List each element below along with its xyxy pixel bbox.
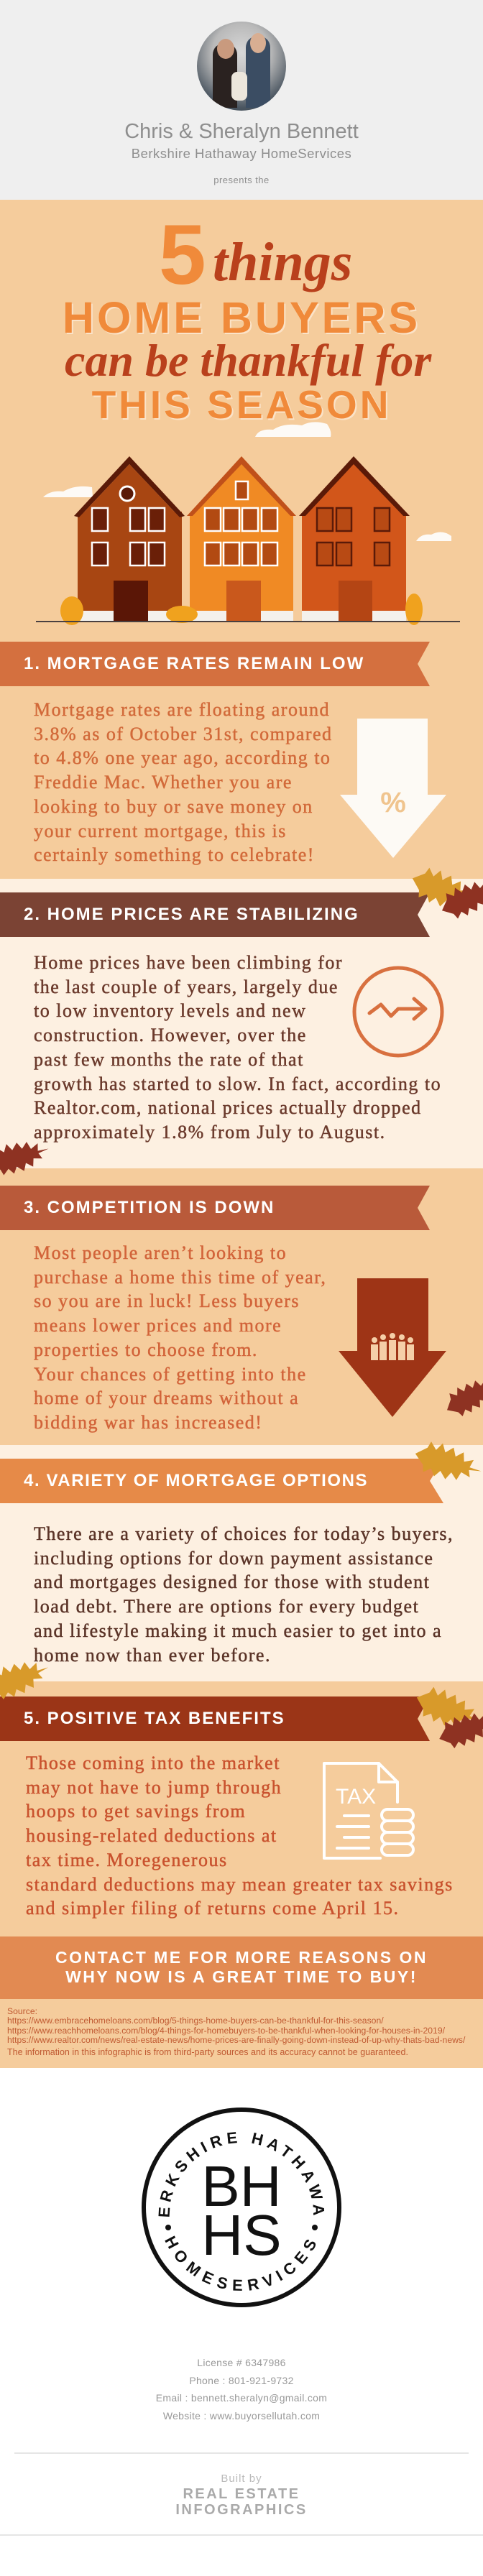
text 5: Those coming into the market <box>26 1753 280 1773</box>
text 3: home of your dreams without a <box>34 1388 299 1408</box>
text 1: Freddie Mac. Whether you are <box>34 772 293 793</box>
built by <box>175 2473 308 2518</box>
banner 2: 2. HOME PRICES ARE STABILIZING <box>24 905 359 924</box>
text 4: There are a variety of choices for today’s buyers, <box>34 1523 454 1544</box>
banner 2 <box>0 892 430 937</box>
sources: https://www.embracehomeloans.com/blog/5-things-home-buyers-can-be-thankful-for-this-season/ <box>7 2016 384 2026</box>
text 3: Most people aren’t looking to <box>34 1242 287 1263</box>
call to action <box>0 1936 483 1999</box>
title: 5 things: 5 <box>159 208 206 303</box>
text 4: home now than ever before. <box>34 1645 271 1666</box>
text 5: standard deductions may mean greater tax savings <box>26 1874 454 1895</box>
clouds <box>43 422 451 541</box>
text 3: means lower prices and more <box>34 1315 282 1336</box>
text 2 <box>34 952 441 1142</box>
text 5: tax time. Moregenerous <box>26 1850 228 1870</box>
built by: Built by <box>221 2473 262 2485</box>
house right <box>299 456 410 621</box>
text 1: Mortgage rates are floating around <box>34 699 330 720</box>
banner 4: 4. VARIETY OF MORTGAGE OPTIONS <box>24 1471 368 1490</box>
text 4: load debt. There are options for every budget <box>34 1596 419 1617</box>
banner 5: 5. POSITIVE TAX BENEFITS <box>24 1709 285 1728</box>
section 1 <box>0 642 446 865</box>
text 2: to low inventory levels and new <box>34 1000 306 1021</box>
house middle <box>187 456 296 621</box>
text 3: purchase a home this time of year, <box>34 1267 326 1288</box>
text 1: 3.8% as of October 31st, compared <box>34 724 333 744</box>
title: THIS SEASON: THIS SEASON <box>92 382 391 427</box>
text 5: housing-related deductions at <box>26 1825 277 1846</box>
section 2 <box>0 879 483 1168</box>
sources <box>7 2006 466 2057</box>
text 2: Home prices have been climbing for <box>34 952 343 973</box>
agent photo <box>197 22 286 111</box>
logo: BHHS: BH <box>201 2154 282 2218</box>
contact info: Email : bennett.sheralyn@gmail.com <box>156 2392 327 2404</box>
title: things <box>213 232 352 292</box>
text 4: and mortgages designed for those with student <box>34 1571 430 1592</box>
banner 3 <box>0 1186 430 1230</box>
text 5: may not have to jump through <box>26 1777 282 1798</box>
contact info: Website : www.buyorsellutah.com <box>163 2410 320 2422</box>
section 4 <box>0 1445 483 1681</box>
text 3: Your chances of getting into the <box>34 1364 307 1385</box>
icon: down arrow with people <box>339 1278 446 1417</box>
text 5: and simpler filing of returns come April 15. <box>26 1898 399 1919</box>
sources: https://www.reachhomeloans.com/blog/4-things-for-homebuyers-to-be-thankful-when-looking-for-houses-in-2019/ <box>7 2026 445 2036</box>
text 3: properties to choose from. <box>34 1339 258 1360</box>
logo: BHHS: HOMESERVICES <box>165 2235 316 2291</box>
leaves <box>0 868 483 1748</box>
built by: INFOGRAPHICS <box>175 2502 308 2518</box>
icon: stabilizing circle <box>352 966 444 1058</box>
logo: BHHS: HS <box>201 2203 282 2267</box>
contact info: License # 6347986 <box>197 2357 286 2368</box>
title: HOME BUYERS: HOME BUYERS <box>63 293 420 342</box>
sources: Source: <box>7 2006 37 2016</box>
beige background <box>0 200 483 2068</box>
text 2: approximately 1.8% from July to August. <box>34 1122 386 1142</box>
banner 5 <box>0 1696 430 1741</box>
logo: BHHS <box>142 2108 341 2307</box>
text 4: including options for down payment assistance <box>34 1548 433 1569</box>
call to action: CONTACT ME FOR MORE REASONS ON <box>55 1948 428 1967</box>
banner 4 <box>0 1459 443 1503</box>
contact info: Phone : 801-921-9732 <box>189 2374 294 2386</box>
header panel <box>0 0 483 200</box>
text 3: bidding war has increased! <box>34 1412 262 1433</box>
text 5: hoops to get savings from <box>26 1801 246 1822</box>
text 3 <box>33 1242 326 1433</box>
illustration: houses <box>36 422 460 625</box>
company: Berkshire Hathaway HomeServices <box>132 146 351 161</box>
text 4 <box>34 1523 454 1666</box>
section 5 <box>0 1696 454 1919</box>
icon: tax document <box>323 1762 415 1860</box>
text 2: construction. However, over the <box>34 1025 307 1045</box>
text 1 <box>34 699 333 865</box>
banner 1: 1. MORTGAGE RATES REMAIN LOW <box>24 654 364 673</box>
text 1: your current mortgage, this is <box>34 821 287 841</box>
text 2: the last couple of years, largely due <box>34 977 339 997</box>
text 4: and lifestyle making it much easier to get into a <box>34 1620 442 1641</box>
sources: The information in this infographic is from third-party sources and its accuracy cannot be guaranteed. <box>7 2047 408 2057</box>
banner 3: 3. COMPETITION IS DOWN <box>24 1198 275 1217</box>
agent name: Chris & Sheralyn Bennett <box>124 120 359 143</box>
icon: tax document: TAX <box>336 1785 376 1809</box>
text 5 <box>26 1753 454 1919</box>
presents the: presents the <box>213 175 270 185</box>
text 2: Realtor.com, national prices actually dropped <box>34 1097 422 1118</box>
contact info <box>156 2357 327 2422</box>
text 1: looking to buy or save money on <box>34 796 313 817</box>
house left <box>74 456 185 621</box>
built by: REAL ESTATE <box>183 2486 300 2502</box>
ground line <box>36 621 460 622</box>
text 2: growth has started to slow. In fact, according to <box>34 1074 441 1094</box>
sources: https://www.realtor.com/news/real-estate-news/home-prices-are-finally-going-down-instead-of-up-why-thats-bad-news/ <box>7 2035 465 2045</box>
banner 1 <box>0 642 430 686</box>
text 2: past few months the rate of that <box>34 1049 304 1070</box>
text 3: so you are in luck! Less buyers <box>34 1291 300 1311</box>
icon: down arrow with percent <box>340 719 446 858</box>
text 1: to 4.8% one year ago, according to <box>34 747 331 768</box>
section 3 <box>0 1186 446 1433</box>
call to action: WHY NOW IS A GREAT TIME TO BUY! <box>65 1967 418 1986</box>
shrubs <box>60 594 423 625</box>
title <box>63 208 432 427</box>
text 1: certainly something to celebrate! <box>34 844 315 865</box>
title: can be thankful for: can be thankful for <box>65 335 431 386</box>
icon: down arrow with percent: % <box>380 787 406 818</box>
